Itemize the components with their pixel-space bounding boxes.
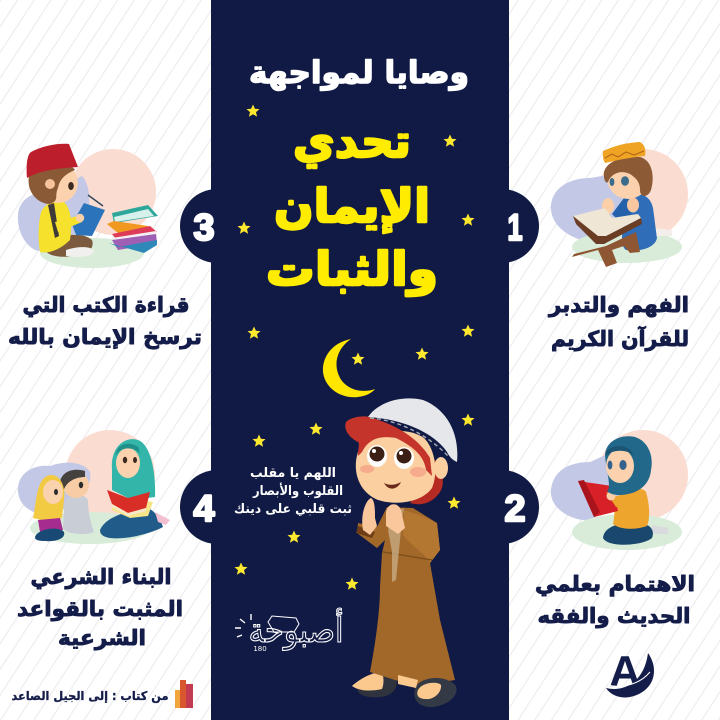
label: tip 2: الاهتمام بعلمي	[535, 572, 695, 596]
heading: main title: الإيمان	[274, 179, 430, 233]
illustration: boy reading with stack of books	[18, 144, 158, 268]
logo: publisher A mark: A	[609, 647, 641, 696]
sandal: left foot	[352, 672, 397, 697]
icon: books	[175, 680, 193, 708]
label: tip 4: البناء الشرعي	[30, 565, 172, 589]
logo: Osbouha 180: 180	[253, 645, 267, 653]
label: tip 3: قراءة الكتب التي	[22, 293, 190, 317]
text: supplication: ثبت قلبي على دينك	[234, 502, 352, 517]
label: tip 1: الفهم والتدبر	[548, 293, 689, 317]
label: tip 4: الشرعية	[58, 626, 146, 650]
sandal: right foot	[398, 675, 457, 707]
illustration: boy praying	[345, 398, 457, 707]
label: tip 1: للقرآن الكريم	[551, 326, 689, 351]
icon: crescent moon	[323, 339, 375, 397]
heading: main title: والثبات	[266, 242, 438, 296]
illustration: boy reading Quran	[551, 142, 688, 267]
stars	[234, 104, 474, 590]
label: tip 4: المثبت بالقواعد	[17, 597, 183, 621]
label: tip 3: ترسخ الإيمان بالله	[8, 325, 202, 349]
label: tip 3	[8, 293, 202, 349]
number badge 1: 1	[508, 207, 522, 248]
text: supplication	[234, 466, 352, 517]
head	[345, 398, 457, 504]
text: supplication: القلوب والأبصار	[252, 482, 343, 499]
number badge 4: 4	[194, 488, 215, 529]
robe	[357, 507, 455, 686]
number badge 2: 2	[504, 488, 526, 529]
heading: main title: تحدي	[293, 114, 411, 168]
illustration: girl reading red book	[551, 430, 688, 550]
logo: publisher A mark	[606, 647, 654, 697]
label: tip 1	[548, 293, 689, 351]
panel: central navy column	[180, 0, 539, 720]
label: tip 2 second line: الحديث والفقه	[538, 604, 690, 628]
heading: main title	[266, 114, 438, 296]
text: source credit: من كتاب : إلى الجيل الصاعد	[12, 689, 168, 703]
logo: Osbouha 180: أصبوحة	[248, 608, 344, 651]
heading: intro line: وصايا لمواجهة	[249, 55, 469, 91]
label: tip 4	[17, 565, 183, 650]
illustration: mother reading to children	[18, 430, 170, 544]
number badge 3: 3	[194, 207, 214, 248]
text: supplication: اللهم يا مقلب	[250, 466, 336, 481]
